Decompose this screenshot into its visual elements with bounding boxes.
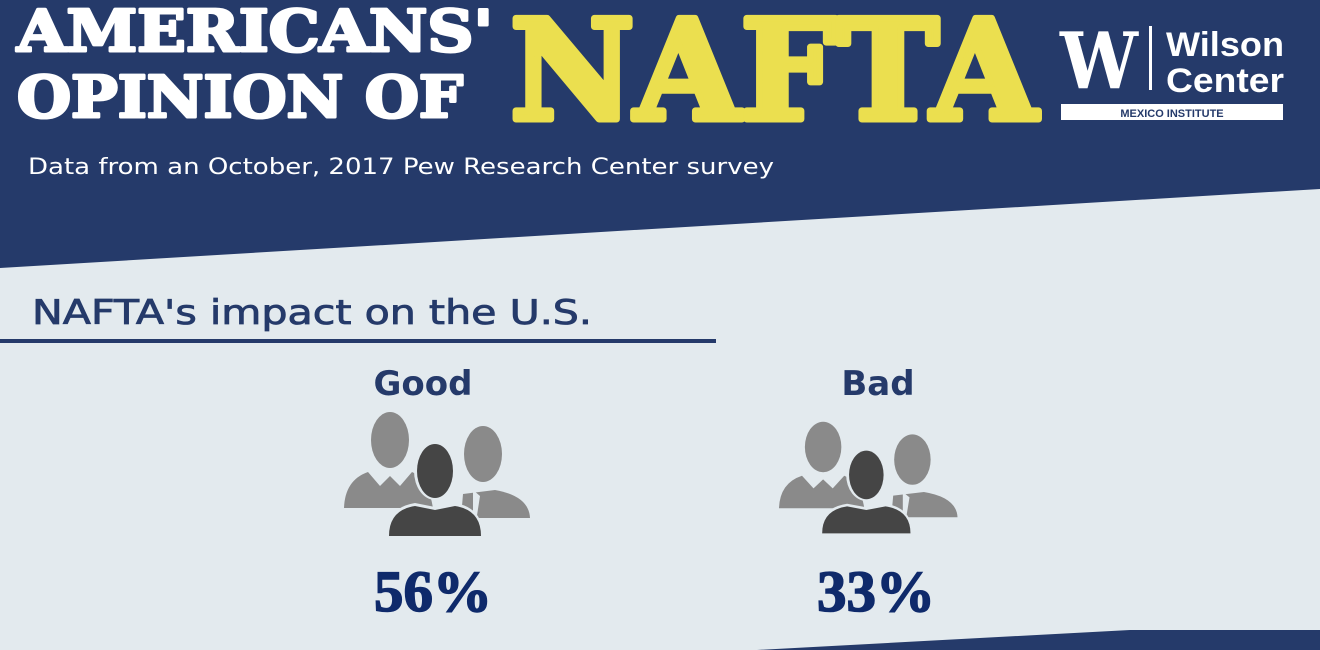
- bottom band: [757, 630, 1320, 650]
- logo: Wilson Center: Wilson: [1166, 26, 1284, 64]
- panel: good: [344, 364, 530, 624]
- logo: Wilson Center: Center: [1166, 62, 1284, 100]
- panel: bad: Bad: [841, 364, 915, 404]
- title: AMERICANS': [16, 0, 493, 65]
- panel: bad: [779, 364, 958, 624]
- title: [16, 0, 1039, 152]
- title: OPINION OF: [17, 64, 463, 131]
- logo: Wilson Center: W: [1059, 16, 1139, 107]
- logo: Wilson Center: MEXICO INSTITUTE: [1120, 108, 1224, 120]
- panel: good: Good: [374, 364, 472, 404]
- section heading: [0, 293, 716, 343]
- panel: bad: 33%: [817, 559, 935, 624]
- logo: Wilson Center: [1059, 16, 1284, 120]
- header band: [0, 0, 1320, 268]
- section heading: NAFTA's impact on the U.S.: [32, 293, 592, 333]
- subtitle: Data from an October, 2017 Pew Research Center survey: [28, 155, 774, 180]
- panel: good: 56%: [374, 559, 492, 624]
